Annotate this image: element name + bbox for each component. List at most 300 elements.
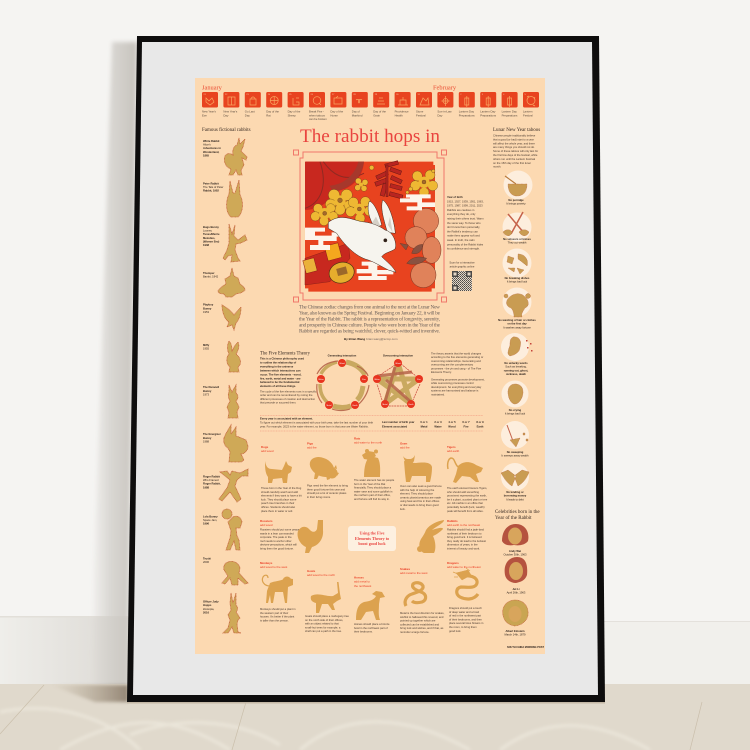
calendar labels: Stone bbox=[416, 110, 423, 114]
Bugs Bunny: Looney bbox=[203, 229, 212, 233]
taboo: unlucky words: Such as breaking, bbox=[505, 365, 527, 369]
chart: generating interaction bbox=[317, 354, 369, 410]
panel: year of birth text: don't know them personally, bbox=[447, 225, 480, 229]
chart: generating interaction: Water bbox=[318, 378, 324, 381]
panel: goats: add wood to the north bbox=[307, 573, 335, 577]
Trubi: 2006 bbox=[203, 560, 209, 564]
portrait: Albert Einstein bbox=[503, 600, 528, 637]
Bugs Bunny: Melodies, bbox=[203, 236, 215, 240]
Duracell Bunny: 1973 bbox=[203, 393, 209, 397]
Playboy Bunny: Bunny bbox=[203, 306, 212, 310]
panel: tigers: prominent representing the earth, bbox=[447, 494, 487, 498]
intro: the first few days of the festival, while bbox=[493, 153, 538, 157]
calendar labels: Day of bbox=[352, 110, 360, 114]
calendar tiles: 29 bbox=[375, 94, 378, 96]
chart: generating interaction: Generating interaction bbox=[328, 354, 357, 358]
leaves bbox=[400, 243, 427, 264]
panel: dragons: good luck. bbox=[449, 629, 462, 633]
icon: dog bbox=[265, 461, 292, 483]
scan prompt: article graphic online bbox=[450, 264, 475, 268]
panel: rabbits: add earth to the northeast bbox=[447, 523, 480, 527]
intro: others run until the Lantern Festival bbox=[493, 157, 536, 161]
title: The rabbit hops in bbox=[300, 126, 441, 147]
panel: dragons: of their bedrooms, and then bbox=[449, 617, 482, 621]
panel: famous fictional rabbits bbox=[202, 128, 251, 633]
panel: pigs: add fire bbox=[307, 446, 317, 450]
portrait: Albert Einstein: Albert Einstein bbox=[506, 630, 524, 633]
taboo: crying: No crying bbox=[509, 409, 521, 412]
taboo: sweeping: No sweeping bbox=[507, 451, 523, 454]
panel: dragons bbox=[447, 561, 484, 633]
lanterns bbox=[305, 162, 364, 210]
heading: Year of the Rabbit bbox=[495, 516, 532, 521]
calendar tiles: 27 bbox=[332, 94, 335, 96]
panel: pigs: in their living rooms. bbox=[307, 495, 331, 499]
chart: overcoming interaction bbox=[373, 354, 423, 408]
calendar tiles: 26 bbox=[310, 94, 314, 96]
panel: dogs: These born in the Year of the Dog bbox=[261, 487, 301, 490]
calendar labels: Day of the bbox=[266, 110, 279, 114]
panel: dogs: should carefully watch and add bbox=[261, 490, 298, 494]
panel: rats: The water element has six people bbox=[354, 479, 394, 482]
intro: will affect the whole year, and there bbox=[493, 141, 535, 145]
panel: pigs: Pigs need the fire element to bring bbox=[307, 484, 348, 488]
taboo: breaking dishes: No breaking dishes bbox=[505, 277, 529, 280]
panel: year of birth text: personality of the Rabbit hides bbox=[447, 242, 484, 246]
panel: monkeys: Monkeys should put a plant in bbox=[260, 608, 296, 611]
panel: snakes: wishful to hallowed this revered, and bbox=[400, 615, 444, 619]
icon: tiger bbox=[448, 458, 483, 483]
panel: roosters: bring them the good fortune. bbox=[260, 546, 294, 550]
panel: snakes: reminder a large fortune. bbox=[400, 630, 430, 634]
calendar labels: Providence bbox=[395, 110, 409, 114]
taboo: washing hair: on the first day bbox=[507, 322, 527, 326]
Miffy: 1955 bbox=[203, 347, 209, 351]
gold coin bbox=[327, 259, 357, 286]
table intro: year. For example, 2023 is the water element, so those born in that year are Water Rabbits. bbox=[260, 424, 369, 428]
panel: rabbits: they really do lead to the luckiest bbox=[447, 539, 486, 543]
panel: monkeys: houses. It's better if the plant bbox=[260, 615, 295, 619]
chart: generating interaction: Earth bbox=[353, 404, 357, 407]
table: Wood bbox=[448, 424, 456, 428]
calendar labels: Day bbox=[245, 113, 250, 117]
Duracell Bunny: The Duracell bbox=[203, 386, 219, 389]
panel: oxen: element. They should place bbox=[400, 492, 433, 496]
panel: snakes: add metal to the west bbox=[400, 571, 428, 575]
Miffy: Miffy bbox=[203, 344, 209, 347]
Roger Rabbit: 1988 bbox=[203, 485, 209, 489]
scan prompt: Scan for a interactive bbox=[449, 262, 475, 264]
intro: that a good (or bad) start to a year bbox=[493, 137, 534, 141]
Trubi: Truski bbox=[203, 558, 211, 560]
panel: oxen: with the help of colouring the bbox=[400, 488, 435, 492]
portrait: Jet Li: April 26th, 1963 bbox=[507, 591, 526, 595]
taboo: unlucky words: running out, ghost, bbox=[504, 368, 528, 372]
taboo: lending money: It leads to debt bbox=[506, 497, 524, 501]
Energizer Bunny: The Energizer bbox=[203, 433, 221, 436]
panel: tigers: The earth element favours Tigers, bbox=[447, 487, 487, 490]
Bugs Bunny: (Warner Bro) bbox=[203, 239, 219, 243]
panel: oxen: luck. bbox=[400, 507, 406, 511]
panel: dogs: elements if they want to have a bit bbox=[261, 494, 302, 498]
icon: goat bbox=[311, 582, 341, 613]
panel: oxen bbox=[400, 442, 442, 511]
portrait: Jet Li: Jet Li bbox=[512, 588, 520, 591]
callout: using the five elements: Elements Theory to bbox=[355, 536, 389, 541]
Duracell Bunny: Bunny bbox=[203, 389, 212, 393]
panel: tigers: peak will benefit from all sides. bbox=[447, 509, 484, 513]
clouds bbox=[305, 194, 435, 280]
panel: year of birth text: Rabbits are cautious in bbox=[447, 208, 475, 212]
taboo: breaking dishes: It brings bad luck bbox=[507, 280, 528, 284]
table: 2 or 3 bbox=[434, 420, 442, 424]
taboo: sweeping bbox=[501, 421, 529, 458]
right explanation text: while overcoming processes control bbox=[431, 381, 474, 385]
calendar labels bbox=[202, 110, 533, 121]
chart: overcoming interaction: Wood bbox=[395, 363, 401, 365]
table: Metal bbox=[421, 424, 428, 428]
panel: snakes: bring luck and wishes, and if that, as bbox=[400, 626, 444, 630]
calendar tiles bbox=[202, 92, 539, 108]
Lola Bunny: Lola Bunny bbox=[203, 516, 218, 518]
chart: overcoming interaction: Earth bbox=[409, 403, 413, 406]
panel: goats bbox=[305, 569, 349, 633]
explanation note: different processes of creation and destruction bbox=[260, 397, 316, 401]
panel: year of birth text: everything they do, only bbox=[447, 212, 476, 216]
calendar labels: New Year's bbox=[223, 110, 237, 114]
panel: horses: Horses bbox=[354, 576, 364, 580]
panel: year of birth text: the same way. To those who bbox=[447, 221, 481, 225]
icon: horse bbox=[356, 591, 385, 620]
Officer Judy Hopps: 2016 bbox=[203, 611, 209, 615]
right explanation text: processes - the yin and yang - of The Five bbox=[431, 366, 482, 370]
panel: rabbits: dimension of years, in the bbox=[447, 543, 478, 547]
explanation note: order and can be remembered by noting the bbox=[260, 393, 313, 397]
calendar labels: Horse bbox=[330, 113, 338, 117]
picture frame bbox=[127, 36, 605, 702]
calendar labels: Go Last bbox=[245, 110, 255, 114]
Thumper: Thumper bbox=[203, 272, 214, 275]
bold explanation: everything in the universe bbox=[260, 364, 294, 368]
panel: dragons: the room, to bring them bbox=[449, 625, 478, 629]
calendar labels: Preparations bbox=[502, 113, 518, 117]
panel: year of birth text: weak. In truth, the calm bbox=[447, 238, 476, 242]
calendar labels: Health bbox=[395, 113, 403, 117]
QR code bbox=[452, 271, 472, 291]
panel: year of birth text: raising their others trust. Warm bbox=[447, 216, 484, 220]
Playboy Bunny bbox=[203, 302, 241, 330]
heading: Celebrities born in the bbox=[495, 510, 540, 515]
icon: snake bbox=[405, 583, 426, 606]
panel: roosters: devices-precautions, which will bbox=[260, 543, 297, 547]
Bugs Bunny bbox=[203, 224, 247, 262]
panel: oxen: add fire bbox=[400, 446, 410, 450]
calendar labels: Lantern Day bbox=[459, 110, 474, 114]
table: 8 or 9 bbox=[476, 420, 484, 424]
table: 0 or 1 bbox=[420, 420, 428, 424]
Playboy Bunny: Playboy bbox=[203, 304, 213, 306]
calendar labels: New Year's bbox=[202, 110, 216, 114]
calendar strip bbox=[202, 84, 539, 121]
panel: dogs: offices. Students should also bbox=[261, 505, 296, 509]
panel: snakes: pointed up together which are bbox=[400, 619, 436, 623]
taboo: lending money bbox=[501, 463, 529, 501]
panel: tigers bbox=[447, 445, 488, 513]
portrait: Andy Wei: Andy Wei bbox=[509, 550, 521, 553]
credit: SOUTH CHINA MORNING POST bbox=[507, 645, 544, 649]
bold explanation: fire, earth, metal and water - are bbox=[260, 376, 301, 380]
taboo: lending money: No lending or bbox=[506, 491, 524, 494]
panel: dragons: of red in the northwest part bbox=[449, 614, 481, 618]
chart: overcoming interaction: Water bbox=[374, 378, 380, 381]
calendar labels: Rat bbox=[266, 113, 271, 117]
panel: roosters: corporate. The peak or the bbox=[260, 535, 292, 539]
portrait: Andy Wei bbox=[502, 524, 528, 557]
panel: rats: water vase and some goldfish in bbox=[354, 489, 393, 493]
panel: monkeys: the western part of their bbox=[260, 611, 288, 615]
calendar tiles: 24 bbox=[268, 94, 271, 96]
panel: roosters bbox=[260, 519, 323, 553]
panel: dogs: peach tree branches in their bbox=[261, 501, 294, 505]
Bugs Bunny: Bugs Bunny bbox=[203, 226, 219, 229]
panel: year element table bbox=[260, 416, 484, 431]
White Rabbit: Wonderland, bbox=[203, 150, 219, 154]
panel: goats: Goats bbox=[307, 569, 315, 573]
calendar labels: Grain bbox=[373, 113, 380, 117]
taboo: unlucky words: No unlucky words bbox=[504, 362, 528, 365]
table bbox=[382, 420, 484, 428]
bold explanation: This is a Chinese philosophy used bbox=[260, 358, 304, 360]
taboo: crying: It brings bad luck bbox=[505, 412, 526, 416]
taboo: scissors: No scissors or knives bbox=[503, 238, 531, 241]
Lola Bunny bbox=[203, 509, 242, 550]
panel: dogs: place them in water or soil. bbox=[261, 509, 293, 513]
calendar tiles: 28 bbox=[353, 94, 357, 96]
panel: horses: Horses should place a bronze bbox=[354, 623, 390, 626]
panel: pigs bbox=[306, 442, 348, 499]
table: Fire bbox=[464, 424, 469, 428]
intro paragraph: Year, also known as the Spring Festival. Beginning on January 22, it will be bbox=[299, 310, 441, 316]
taboo: porridge: No porridge bbox=[508, 199, 524, 202]
panel: rabbits: bring good luck. It is believed bbox=[447, 535, 482, 539]
panel: monkeys: add wood to the west bbox=[260, 565, 288, 569]
calendar labels: Day of the bbox=[288, 110, 300, 114]
panel: goats: with an object related to that bbox=[305, 622, 339, 626]
table: Last number of birth year bbox=[382, 420, 414, 424]
Roger Rabbit: Who Framed bbox=[203, 478, 219, 482]
panel: year of birth text: 1915, 1927, 1939, 1951, 1963, bbox=[447, 199, 484, 203]
Thumper: Bambi, 1942 bbox=[203, 275, 219, 279]
panel: oxen: using heat and fire in their offices bbox=[400, 499, 440, 503]
panel: oxen: Oxen can also seek a good fortune bbox=[400, 485, 442, 488]
right explanation text: maintained. bbox=[431, 392, 445, 396]
taboo: lending money: borrowing money bbox=[504, 494, 527, 498]
calendar labels: Lantern bbox=[523, 110, 532, 114]
calendar labels: Preparations bbox=[459, 113, 475, 117]
taboo: crying bbox=[502, 380, 528, 416]
panel: tigers: etc. All marble in an office that bbox=[447, 501, 483, 505]
panel: dogs bbox=[261, 445, 302, 513]
panel: roosters: Roosters bbox=[260, 519, 273, 523]
panel: goats: shelf can put a path in the tree. bbox=[305, 629, 342, 633]
taboo: porridge: It brings poverty bbox=[506, 202, 526, 206]
taboo: scissors bbox=[502, 212, 532, 245]
panel: rats: the northern part of their office, bbox=[354, 493, 391, 497]
panel: dogs: Dogs bbox=[261, 445, 268, 449]
portrait: Albert Einstein: March 14th, 1879 bbox=[505, 633, 526, 637]
panel: horses: the northwest bbox=[354, 584, 372, 588]
matboard bbox=[133, 42, 598, 695]
icon: pig bbox=[306, 453, 339, 481]
panel: tigers: add earth bbox=[447, 449, 460, 453]
panel: rabbits: Rabbits bbox=[447, 519, 458, 523]
taboo: porridge bbox=[504, 170, 532, 206]
panel: rabbits: interest of beauty and work. bbox=[447, 546, 480, 550]
table intro: To figure out which element is associated with your birth year, take the last number of your birth bbox=[260, 420, 374, 424]
panel: dragons: Dragons should put a touch bbox=[449, 607, 482, 610]
callout: using the five elements: boost good luck bbox=[358, 541, 386, 546]
Energizer Bunny bbox=[203, 425, 248, 462]
calendar tiles: 21 bbox=[204, 94, 207, 96]
calendar tiles: 3 bbox=[482, 94, 484, 96]
taboo: washing hair bbox=[498, 288, 536, 329]
bold explanation: to outline the relationship of bbox=[260, 360, 296, 364]
panel: goats: small-hut trees for example, a bbox=[305, 625, 341, 629]
poster bbox=[195, 78, 545, 654]
panel: rats: Rats bbox=[354, 436, 360, 440]
Lola Bunny: Space Jam, bbox=[203, 518, 217, 522]
chart: generating interaction: Fire bbox=[362, 379, 367, 381]
main illustration: rabbit with blossoms bbox=[303, 161, 441, 292]
calendar labels: Son-in-Law bbox=[437, 110, 452, 114]
calendar labels: when taboos bbox=[309, 113, 325, 117]
panel: dragons: add water to the northeast bbox=[447, 565, 481, 569]
taboo: unlucky words: sickness, death bbox=[506, 372, 526, 376]
bold explanation: occur. The five elements - wood, bbox=[260, 372, 302, 376]
taboo: sweeping: It sweeps away wealth bbox=[502, 454, 529, 458]
calendar labels: Festival bbox=[523, 113, 533, 117]
icon: dragon bbox=[453, 568, 478, 599]
Bugs Bunny: 1938 bbox=[203, 243, 209, 247]
calendar labels: Sheep bbox=[288, 113, 296, 117]
panel: tigers: Tigers bbox=[447, 445, 456, 449]
panel: tigers: potentially benefit (luck, wealth) bbox=[447, 505, 485, 509]
panel: horses: bowl in the northwest part of bbox=[354, 626, 388, 630]
White Rabbit: Adventures in bbox=[203, 146, 221, 150]
calendar labels: Eve bbox=[202, 113, 207, 117]
panel: year of birth text: make them appear soft and bbox=[447, 234, 480, 238]
right explanation text: overcoming relationships. Generating and bbox=[431, 359, 481, 363]
calendar tiles: 23 bbox=[246, 94, 250, 96]
panel: pigs: them good fortune this year and bbox=[307, 487, 345, 491]
byline: By Brian Wang brian.wang@scmp.com bbox=[344, 337, 398, 341]
panel: lunar new year taboos bbox=[493, 128, 540, 501]
calendar labels: Festival bbox=[416, 113, 426, 117]
chart: overcoming interaction: Overcoming interaction bbox=[383, 354, 413, 358]
panel: celebrities born in the year of the rabbit bbox=[495, 510, 540, 637]
icon: rooster bbox=[298, 520, 323, 553]
portrait: Jet Li bbox=[505, 557, 527, 595]
calendar labels: Lantern Day bbox=[480, 110, 495, 114]
panel: rabbits: Rabbits should find a jade-land bbox=[447, 528, 484, 532]
panel: tigers: who should add something bbox=[447, 490, 479, 494]
panel: year of birth text: Year of birth bbox=[447, 195, 463, 199]
month label: January: January bbox=[202, 84, 223, 92]
bold explanation: believed to be the fundamental bbox=[260, 380, 300, 384]
Peter Rabbit: Rabbit, 1902 bbox=[203, 189, 219, 193]
taboo: washing hair: No washing of hair or clothes bbox=[498, 319, 536, 322]
White Rabbit: 1865 bbox=[203, 153, 209, 157]
table intro: Every year is associated with an element. bbox=[260, 418, 313, 420]
explanation note: The cycle of the five elements runs in a specific bbox=[260, 390, 316, 394]
table: Element associated bbox=[382, 424, 407, 428]
heading: Lunar New Year taboos bbox=[493, 128, 540, 133]
callout: using the five elements bbox=[348, 526, 396, 551]
Energizer Bunny: 1988 bbox=[203, 440, 209, 444]
table: Water bbox=[434, 424, 442, 428]
panel: year of birth text: 1975, 1987, 1999, 2011, 2023 bbox=[447, 204, 483, 208]
panel: snakes: Snakes bbox=[400, 567, 410, 571]
panel: monkeys: is taller than the person. bbox=[260, 618, 289, 622]
intro paragraph: The Chinese zodiac changes from one animal to the next at the Lunar New bbox=[299, 304, 440, 310]
calendar tiles: 25 bbox=[289, 94, 292, 96]
icon: rabbit bbox=[417, 520, 444, 553]
Roger Rabbit: Roger Rabbit bbox=[203, 476, 220, 478]
panel: oxen: ceramic plants/ceramics are made bbox=[400, 495, 441, 499]
chart: overcoming interaction: Fire bbox=[417, 379, 422, 381]
bold explanation: elements of all these things. bbox=[260, 384, 296, 388]
calendar labels: Preparations bbox=[480, 113, 497, 117]
bold explanation: between which interactions can bbox=[260, 368, 301, 372]
calendar labels: can be broken bbox=[309, 117, 327, 121]
Miffy bbox=[203, 341, 240, 372]
calendar tiles: 5 bbox=[524, 94, 526, 96]
panel: year of birth text: its confidence and strength. bbox=[447, 247, 480, 251]
panel: roosters: add wood bbox=[260, 523, 273, 527]
taboo: washing hair: It washes away fortune bbox=[503, 325, 531, 329]
intro: on the 15th day of the first lunar bbox=[493, 161, 531, 165]
Officer Judy Hopps: Zootopia, bbox=[203, 607, 214, 611]
Trubi bbox=[203, 556, 248, 585]
panel: snakes bbox=[400, 567, 445, 634]
panel: dogs: luck. They should place some bbox=[261, 497, 297, 501]
icon: monkey bbox=[262, 575, 293, 603]
Bugs Bunny: Tunes/Merrie bbox=[203, 232, 220, 236]
panel: pigs: should put a lot of ceramic plates bbox=[307, 491, 347, 495]
Peter Rabbit: The Tale of Peter bbox=[203, 185, 224, 189]
panel: goats: Goats should place a mahogany tree bbox=[305, 615, 349, 618]
panel: monkeys bbox=[260, 561, 296, 622]
Energizer Bunny: Bunny bbox=[203, 436, 212, 440]
panel: roosters: Roosters should put some peace bbox=[260, 528, 299, 532]
icon: ox bbox=[403, 455, 432, 482]
right explanation text: Generating processes promote development, bbox=[431, 378, 485, 382]
section heading: The Five Elements Theory bbox=[260, 352, 311, 356]
right explanation text: The theory asserts that the world changes bbox=[431, 352, 481, 356]
calendar tiles: 2 bbox=[460, 94, 462, 96]
explanation note: that precede or succeed them. bbox=[260, 401, 297, 405]
intro: Chinese people traditionally believe bbox=[493, 134, 535, 138]
panel: rats: financially. They should place a bbox=[354, 486, 392, 490]
intro: are many things you should not do. bbox=[493, 145, 535, 149]
Duracell Bunny bbox=[203, 385, 239, 418]
panel: snakes: collected can be established and bbox=[400, 622, 440, 626]
calendar labels: Day of the bbox=[373, 110, 386, 114]
panel: roosters: roof needs to anchor other bbox=[260, 539, 292, 543]
taboo: breaking dishes bbox=[502, 248, 532, 284]
Thumper bbox=[203, 268, 245, 297]
panel: monkeys: Monkeys bbox=[260, 561, 272, 565]
